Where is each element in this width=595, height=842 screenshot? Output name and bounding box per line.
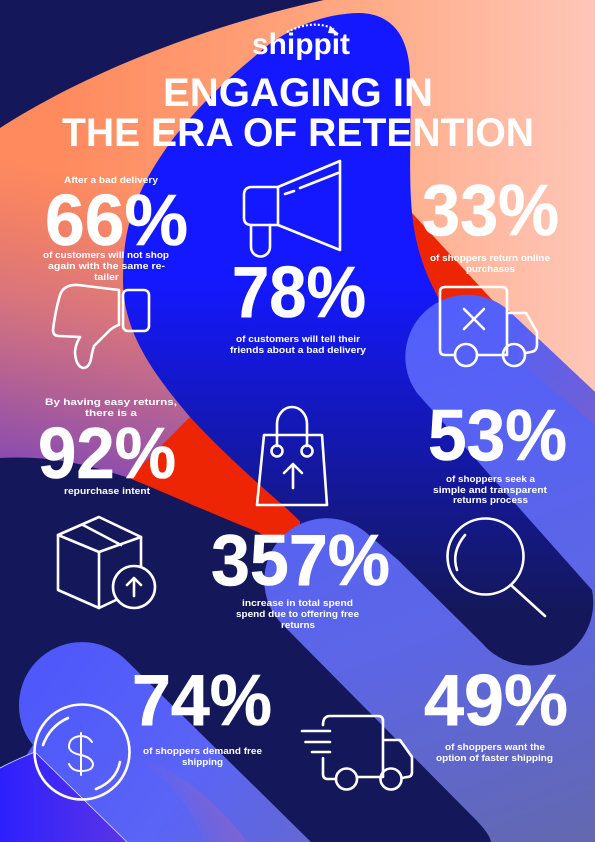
icon: fast delivery truck [302,716,412,790]
stat: 49%: 49% [424,661,568,741]
stat: 66%: of customers will not shop [43,250,170,260]
stat: 357%: spend due to offering free [236,609,359,619]
stat: 53%: of shoppers seek a [446,474,536,484]
icon: thumbs down [53,285,149,368]
stat: 78%: friends about a bad delivery [230,345,366,355]
stat: 74%: 74% [132,661,272,741]
stat: 357%: 357% [211,521,390,601]
stat: 74%: of shoppers demand free [143,746,262,756]
stat: 33%: 33% [422,171,559,251]
icon: dollar coin [34,704,130,800]
stat: 66%: 66% [45,181,188,261]
stat: 53%: simple and transparent [433,485,547,495]
logo: shippit: shippit [252,28,350,61]
stat: 66%: After a bad delivery [64,175,158,185]
stat: 49%: of shoppers want the [445,742,545,752]
stat: 33%: of shoppers return online [430,253,550,263]
icon: parcel box [58,517,155,608]
stat: 78%: 78% [232,253,366,333]
stat: 53%: 53% [428,396,567,476]
stat: 92%: repurchase intent [64,486,150,496]
title [62,71,534,155]
icon: shopping bag [257,407,327,505]
stat: 74%: shipping [182,757,223,767]
stat: 78%: of customers will tell their [236,334,361,344]
stat: 357%: increase in total spend [242,598,353,608]
stat: 49%: option of faster shipping [436,753,553,763]
stat: 92%: 92% [38,414,176,494]
icon: magnifying glass [448,518,545,616]
icon: megaphone [244,161,340,256]
stat: 92%: there is a [85,408,138,418]
title: ENGAGING IN [163,71,433,115]
icon: truck with cross [440,287,537,366]
stat: 53%: returns process [453,495,528,505]
stat: 33%: purchases [466,264,515,274]
title: THE ERA OF RETENTION [62,111,534,155]
stat: 66%: tailer [94,272,120,282]
stat: 92%: By having easy returns, [45,397,177,407]
stat: 66%: again with the same re- [48,261,165,271]
stat: 357%: returns [281,620,315,630]
